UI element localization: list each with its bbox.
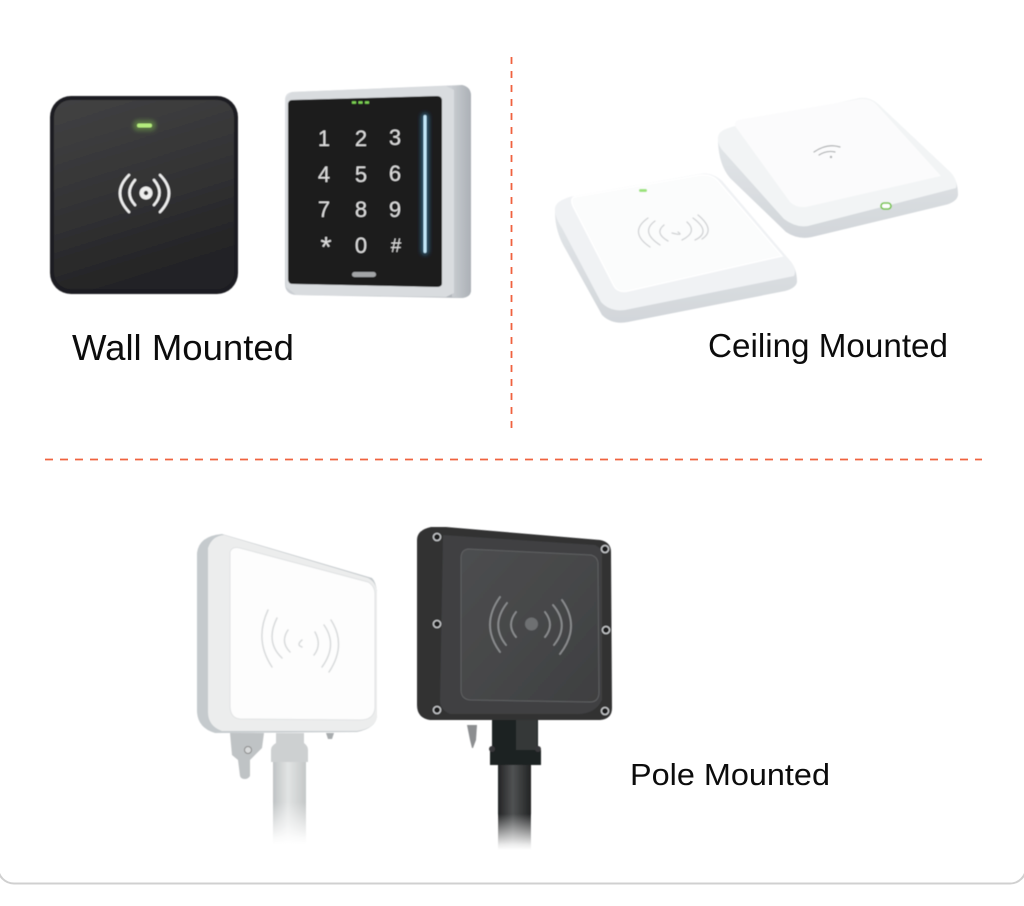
label: wall mounted: Wall Mounted: [72, 327, 294, 368]
panel: ceiling mounted: [555, 98, 958, 364]
keypad digits: 8: [355, 197, 367, 222]
icon: dark wall reader: [50, 96, 238, 294]
horizontal dashed divider: [45, 458, 982, 460]
keypad digits: 3: [389, 125, 401, 150]
keypad digits: 2: [355, 126, 367, 151]
icon: white ceiling reader back: [718, 98, 958, 238]
keypad digits: 7: [318, 197, 330, 222]
dark pole: [489, 720, 541, 850]
keypad digits: 4: [318, 162, 330, 187]
icon: white ceiling reader front: [555, 174, 797, 323]
vertical dashed divider: [510, 57, 512, 428]
keypad digits: [318, 125, 402, 264]
keypad digits: 0: [355, 233, 367, 258]
white pole: [270, 733, 309, 844]
keypad digits: #: [391, 236, 402, 257]
keypad digits: 9: [389, 197, 401, 222]
icon: white pole reader: [197, 534, 377, 844]
mounting screws: [433, 533, 610, 715]
label: ceiling mounted: Ceiling Mounted: [708, 327, 948, 364]
panel: wall mounted: [50, 85, 471, 368]
keypad digits: *: [320, 232, 332, 264]
keypad digits: 6: [389, 161, 401, 186]
icon: dark pole reader: [417, 527, 612, 850]
keypad digits: 5: [355, 162, 367, 187]
icon: keypad reader: [285, 85, 471, 298]
keypad digits: 1: [318, 126, 330, 151]
panel: pole mounted: [197, 527, 830, 850]
label: pole mounted: Pole Mounted: [630, 757, 830, 792]
